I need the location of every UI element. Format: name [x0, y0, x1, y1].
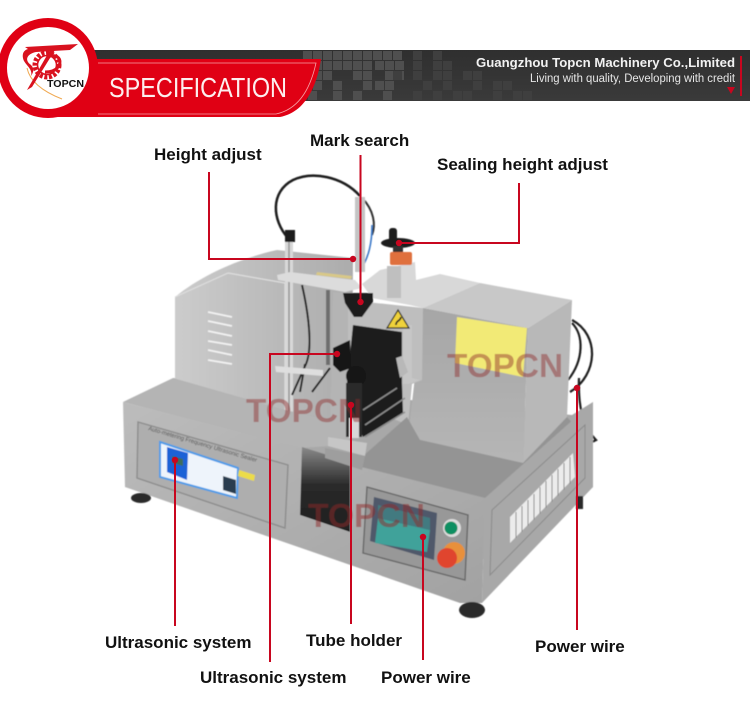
watermark 1: TOPCN: [246, 392, 362, 429]
rear column: [355, 197, 365, 272]
yellow tag: [238, 470, 255, 481]
led readout: [172, 456, 183, 466]
warning sign: [387, 310, 409, 328]
callout: mark search: Mark search: [310, 131, 409, 150]
knot under actuator: [346, 366, 366, 386]
center column backing: [330, 292, 350, 440]
right wires: [568, 320, 596, 442]
watermark 2: TOPCN: [447, 347, 563, 384]
hand knob: [381, 228, 415, 265]
callout: sealing height adjust: [396, 155, 608, 246]
yellow label: [455, 317, 527, 377]
callout: ultrasonic system center: [200, 351, 346, 687]
callout: power wire right: Power wire: [535, 637, 625, 656]
lower holder plate: [325, 448, 365, 470]
left control frame: [137, 422, 288, 528]
orange swoosh: [27, 68, 62, 99]
callout: height adjust: [154, 145, 356, 262]
panel caption: Auto-metering Frequency Ultrasonic Sealer: [147, 426, 257, 464]
company name: Guangzhou Topcn Machinery Co.,Limited: [476, 56, 735, 70]
small digital meter: [223, 476, 236, 494]
white block: [261, 412, 308, 436]
logo badge: [0, 18, 98, 118]
company slogan: Living with quality, Developing with credit: [530, 73, 736, 85]
callout: tube holder: [306, 402, 402, 650]
upper base top: [123, 378, 345, 448]
black actuator: [333, 340, 351, 372]
cables at the top: [276, 176, 374, 264]
left pillar with sensor: [285, 230, 295, 420]
knob stem: [387, 266, 401, 298]
horizontal bar: [275, 366, 323, 376]
red stop button: [437, 542, 465, 568]
tube holder plate: [328, 437, 367, 456]
ribbon title: SPECIFICATION: [109, 72, 287, 103]
header band: [90, 50, 750, 101]
clamp on window: [396, 356, 408, 378]
vent slots: [208, 312, 232, 364]
top plate: [277, 272, 362, 292]
right box front: [408, 308, 528, 463]
front door frame: [348, 300, 423, 425]
inner cables: [292, 285, 330, 395]
tray rails: [363, 388, 405, 437]
housing lip: [175, 273, 285, 420]
red vertical accent bar: [740, 56, 742, 96]
callout: sealing height adjust: Sealing height adjust: [437, 155, 608, 174]
feet: [131, 493, 583, 618]
right box side: [523, 300, 572, 463]
black nozzle: [343, 293, 373, 317]
callout: ultrasonic system center: Ultrasonic system: [200, 668, 346, 687]
red marker triangle: [727, 87, 735, 94]
dark window: [347, 325, 403, 437]
base right side: [482, 402, 593, 603]
callout: power wire center: Power wire: [381, 668, 471, 687]
side panel frame: [490, 425, 585, 575]
callout: power wire right: [535, 385, 625, 656]
recess interior: [300, 447, 350, 532]
specification ribbon: [50, 59, 321, 117]
door lower flange: [403, 325, 420, 384]
letter P stem: [27, 50, 55, 90]
right base top: [353, 417, 577, 498]
gear: [35, 53, 59, 77]
letter T bar with swirl: [23, 44, 78, 76]
teal screen: [375, 518, 430, 552]
watermark 3: TOPCN: [308, 497, 425, 534]
letter P bowl: [45, 56, 60, 72]
base front face: [123, 402, 485, 603]
green button: [443, 519, 461, 537]
knob plate: [362, 262, 480, 308]
mosaic pattern: [303, 51, 404, 100]
side grill: [510, 453, 575, 543]
callout: mark search: [310, 131, 409, 305]
dark screen bezel: [370, 497, 437, 560]
plate yellow label: [316, 272, 352, 279]
base back part: [173, 378, 593, 560]
right control frame: [363, 487, 468, 580]
right box top: [423, 283, 572, 328]
callout: power wire center: [381, 534, 471, 687]
callout: ultrasonic system left: [105, 457, 251, 652]
callout: ultrasonic system left: Ultrasonic system: [105, 633, 251, 652]
machine illustration: [123, 176, 596, 618]
callout: height adjust: Height adjust: [154, 145, 262, 164]
thin rear rod: [326, 290, 330, 365]
dark blue keypad: [167, 447, 188, 480]
rear housing: [175, 250, 353, 425]
callout: tube holder: Tube holder: [306, 631, 402, 650]
tube column: [346, 383, 362, 437]
blue display panel: [160, 442, 238, 498]
logo wordmark: TOPCN: [47, 78, 84, 90]
